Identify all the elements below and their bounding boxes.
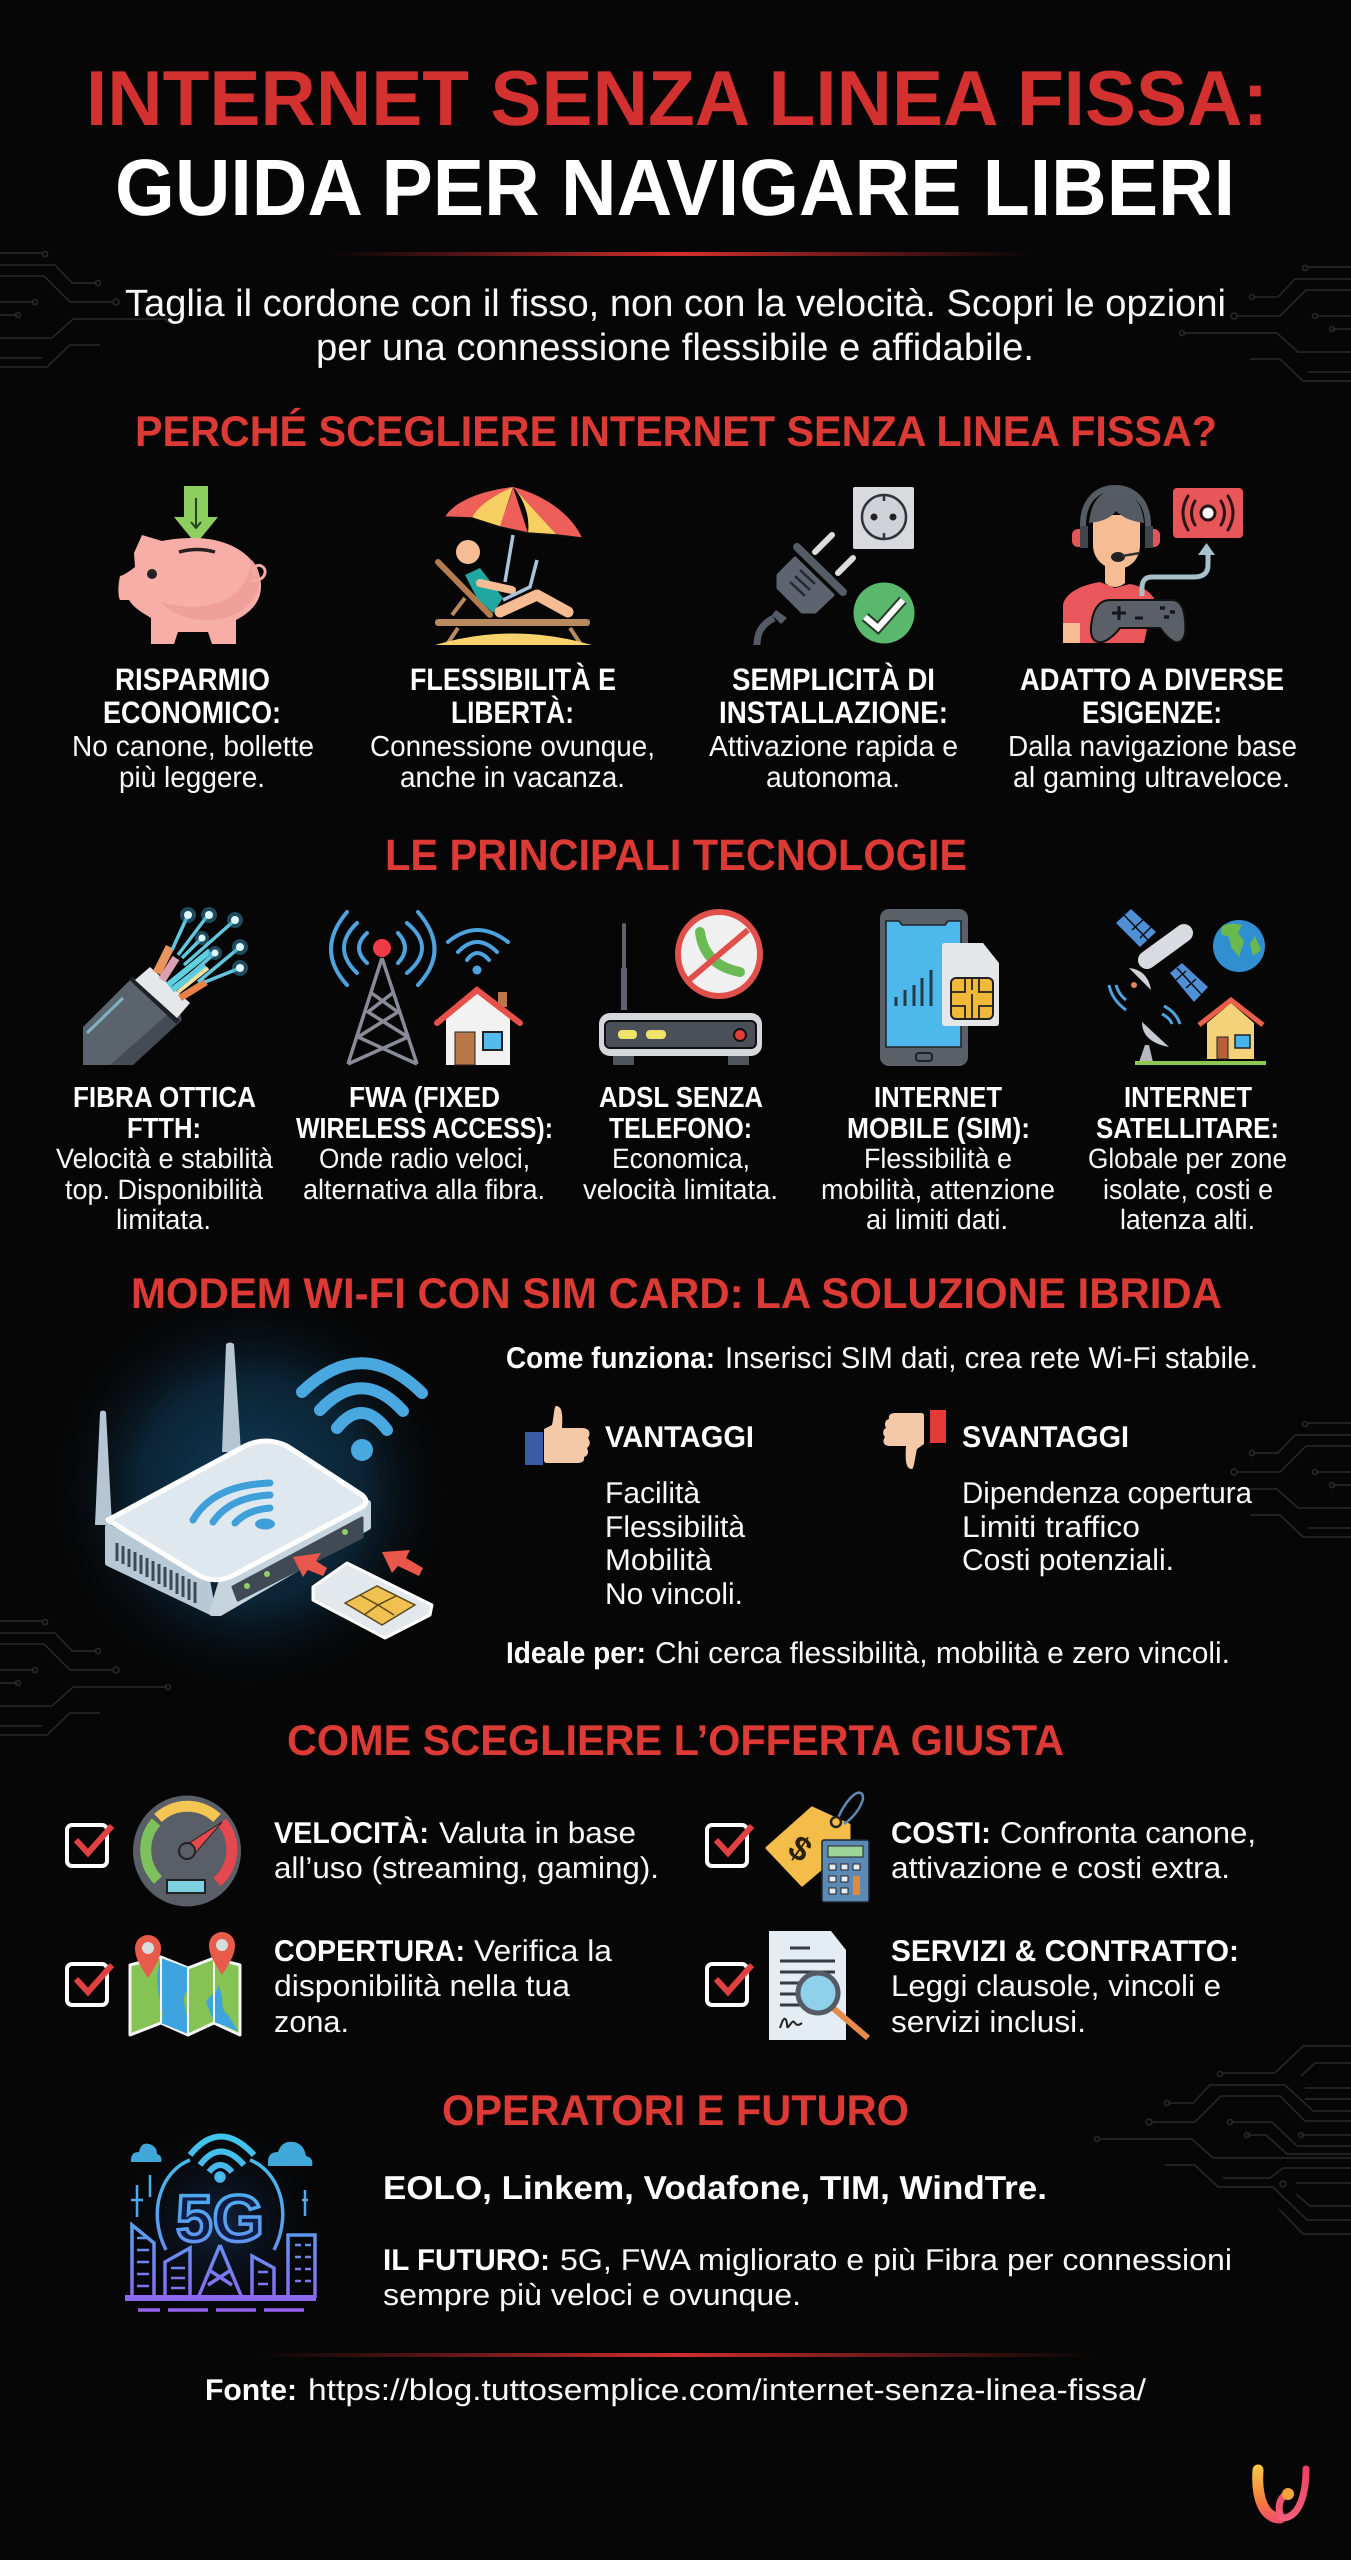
text bbox=[370, 662, 655, 794]
heading: tecnologie: LE PRINCIPALI TECNOLOGIE bbox=[385, 831, 967, 880]
text: Confronta canone, bbox=[1000, 1817, 1256, 1850]
text: Economica, bbox=[612, 1143, 750, 1174]
heading: modem: MODEM WI-FI CON SIM CARD: LA SOLUZIONE IBRIDA bbox=[131, 1270, 1222, 1318]
list: Dipendenza copertura bbox=[962, 1477, 1252, 1510]
icon: price tag and calculator bbox=[767, 1793, 869, 1902]
text: TELEFONO: bbox=[609, 1113, 752, 1145]
text: Flessibilità e bbox=[864, 1143, 1012, 1174]
text: alternativa alla fibra. bbox=[303, 1174, 545, 1205]
text: Dalla navigazione base bbox=[1008, 731, 1297, 763]
text: ideale per: Ideale per: bbox=[506, 1637, 646, 1670]
text: il futuro bbox=[383, 2244, 1232, 2312]
icon: checkbox bbox=[67, 1825, 112, 1866]
text: WIRELESS ACCESS): bbox=[296, 1113, 553, 1145]
text: ideale per: Chi cerca flessibilità, mobilità e zero vincoli. bbox=[655, 1637, 1230, 1670]
title bbox=[86, 54, 1268, 232]
text: ESIGENZE: bbox=[1082, 695, 1222, 730]
panel: fibra ottica bbox=[56, 907, 273, 1235]
icon: 5G neon city bbox=[110, 2115, 330, 2335]
text: COSTI: bbox=[891, 1817, 991, 1850]
text: operatori: EOLO, Linkem, Vodafone, TIM, WindTre. bbox=[383, 2169, 1047, 2206]
icon: map with pins bbox=[130, 1932, 240, 2035]
icon: 5G neon city: 5G bbox=[176, 2181, 264, 2255]
text: Valuta in base bbox=[439, 1817, 636, 1850]
text bbox=[56, 1082, 273, 1235]
text: COPERTURA: bbox=[274, 1935, 465, 1968]
logo bbox=[1258, 2469, 1306, 2518]
text: il futuro: 5G, FWA migliorato e più Fibra per connessioni bbox=[560, 2244, 1232, 2277]
icon: beach lounger with umbrella bbox=[435, 487, 592, 645]
icon: speedometer bbox=[133, 1796, 241, 1906]
panel: servizi e contratto bbox=[707, 1931, 1239, 2040]
panel: flessibilità e libertà bbox=[370, 487, 655, 794]
text: all’uso (streaming, gaming). bbox=[274, 1852, 659, 1885]
text: velocità limitata. bbox=[583, 1174, 778, 1205]
source line: https://blog.tuttosemplice.com/internet-senza-linea-fissa/ bbox=[308, 2374, 1147, 2407]
list bbox=[962, 1477, 1252, 1577]
icon: checkbox bbox=[707, 1825, 752, 1866]
text: VELOCITÀ: bbox=[274, 1816, 429, 1850]
text bbox=[72, 662, 314, 794]
icon: piggy bank bbox=[118, 486, 265, 644]
text: servizi inclusi. bbox=[891, 2006, 1086, 2039]
panel: svantaggi bbox=[883, 1410, 1252, 1577]
text: FLESSIBILITÀ E bbox=[410, 662, 616, 697]
heading: operatori e futuro: OPERATORI E FUTURO bbox=[442, 2087, 909, 2135]
text: disponibilità nella tua bbox=[274, 1970, 570, 2003]
text: Attivazione rapida e bbox=[709, 731, 958, 763]
panel: ADSL senza telefono bbox=[583, 912, 778, 1205]
text: RISPARMIO bbox=[115, 662, 270, 697]
icon: router and crossed phone bbox=[599, 912, 762, 1065]
text bbox=[1008, 662, 1297, 794]
icon: checkbox bbox=[707, 1964, 752, 2005]
text: attivazione e costi extra. bbox=[891, 1852, 1230, 1885]
text bbox=[709, 662, 958, 794]
text: ADSL SENZA bbox=[599, 1082, 763, 1114]
text: limitata. bbox=[116, 1204, 211, 1235]
panel: internet satellitare bbox=[1088, 909, 1287, 1235]
text bbox=[296, 1082, 553, 1205]
icon: radio tower and house bbox=[331, 912, 520, 1065]
panel: internet mobile bbox=[821, 909, 1055, 1235]
text: Connessione ovunque, bbox=[370, 731, 655, 763]
icon: gamer with controller bbox=[1063, 488, 1243, 643]
list: Costi potenziali. bbox=[962, 1544, 1174, 1577]
text: LIBERTÀ: bbox=[451, 695, 574, 730]
title: GUIDA PER NAVIGARE LIBERI bbox=[115, 143, 1235, 232]
icon: checkbox bbox=[67, 1964, 112, 2005]
text bbox=[274, 1816, 659, 1885]
text: SERVIZI & CONTRATTO: bbox=[891, 1935, 1239, 1968]
icon: thumb down bbox=[883, 1410, 946, 1469]
text: zona. bbox=[274, 2006, 349, 2039]
text: il futuro: sempre più veloci e ovunque. bbox=[383, 2279, 801, 2312]
text: SATELLITARE: bbox=[1096, 1113, 1279, 1145]
text: isolate, costi e bbox=[1103, 1174, 1273, 1205]
list: Facilità bbox=[605, 1477, 700, 1510]
panel: velocità bbox=[67, 1796, 659, 1906]
text: FWA (FIXED bbox=[349, 1082, 500, 1114]
text: ai limiti dati. bbox=[866, 1204, 1008, 1235]
text: Verifica la bbox=[474, 1935, 612, 1968]
text: FTTH: bbox=[127, 1113, 201, 1145]
title: INTERNET SENZA LINEA FISSA: bbox=[86, 54, 1268, 142]
heading: perché scegliere: PERCHÉ SCEGLIERE INTERNET SENZA LINEA FISSA? bbox=[135, 407, 1217, 456]
list: No vincoli. bbox=[605, 1578, 743, 1611]
panel: semplicità di installazione bbox=[709, 487, 958, 794]
text: SEMPLICITÀ DI bbox=[732, 662, 935, 697]
list: Mobilità bbox=[605, 1544, 712, 1577]
text: Leggi clausole, vincoli e bbox=[891, 1970, 1221, 2003]
list: Flessibilità bbox=[605, 1511, 745, 1544]
subtitle bbox=[125, 283, 1226, 369]
panel: costi bbox=[707, 1793, 1256, 1902]
text: INSTALLAZIONE: bbox=[719, 695, 948, 730]
text: come funziona: Come funziona: bbox=[506, 1342, 715, 1375]
text: mobilità, attenzione bbox=[821, 1174, 1055, 1205]
text: FIBRA OTTICA bbox=[73, 1082, 256, 1114]
list: Limiti traffico bbox=[962, 1511, 1140, 1544]
text: INTERNET bbox=[1124, 1082, 1252, 1114]
text bbox=[891, 1935, 1239, 2039]
icon: document with magnifier bbox=[769, 1931, 868, 2040]
icon: plug, socket and check bbox=[757, 487, 914, 645]
heading: come scegliere: COME SCEGLIERE L’OFFERTA GIUSTA bbox=[287, 1717, 1064, 1765]
text bbox=[821, 1082, 1055, 1235]
text: al gaming ultraveloce. bbox=[1013, 762, 1290, 794]
text: Velocità e stabilità bbox=[56, 1143, 273, 1174]
text: il futuro: IL FUTURO: bbox=[383, 2244, 550, 2277]
text bbox=[891, 1817, 1256, 1885]
text bbox=[274, 1935, 612, 2039]
icon: thumb up bbox=[525, 1406, 590, 1465]
text: INTERNET bbox=[874, 1082, 1002, 1114]
text bbox=[583, 1082, 778, 1205]
text: come funziona: Inserisci SIM dati, crea rete Wi-Fi stabile. bbox=[725, 1342, 1258, 1375]
panel: vantaggi bbox=[525, 1406, 754, 1611]
text: Globale per zone bbox=[1088, 1143, 1287, 1174]
icon: modem with SIM card and wifi bbox=[95, 1342, 432, 1638]
panel: copertura bbox=[67, 1932, 612, 2039]
text: Onde radio veloci, bbox=[319, 1143, 530, 1174]
icon: fiber cable bbox=[83, 907, 248, 1065]
list bbox=[605, 1477, 745, 1611]
icon: satellite, dish, globe and house bbox=[1109, 909, 1266, 1063]
subtitle: Taglia il cordone con il fisso, non con la velocità. Scopri le opzioni bbox=[125, 283, 1226, 325]
icon: smartphone with SIM bbox=[880, 909, 999, 1066]
text: latenza alti. bbox=[1120, 1204, 1255, 1235]
icon: price tag and calculator: $ bbox=[781, 1828, 819, 1870]
text: come funziona bbox=[506, 1342, 1258, 1375]
text: autonoma. bbox=[766, 762, 900, 794]
subtitle: per una connessione flessibile e affidabile. bbox=[316, 327, 1034, 369]
text: più leggere. bbox=[119, 762, 265, 794]
source line: Fonte: bbox=[205, 2374, 297, 2407]
panel: risparmio economico bbox=[72, 486, 314, 794]
text: top. Disponibilità bbox=[65, 1174, 263, 1205]
text: ADATTO A DIVERSE bbox=[1020, 662, 1284, 697]
label: VANTAGGI bbox=[605, 1421, 754, 1454]
text: ECONOMICO: bbox=[103, 695, 281, 730]
text: No canone, bollette bbox=[72, 731, 314, 763]
text bbox=[1088, 1082, 1287, 1235]
label: SVANTAGGI bbox=[962, 1421, 1129, 1454]
text: MOBILE (SIM): bbox=[847, 1113, 1030, 1145]
text: anche in vacanza. bbox=[400, 762, 625, 794]
panel: adatto a diverse esigenze bbox=[1008, 488, 1297, 794]
panel: FWA bbox=[296, 912, 553, 1205]
